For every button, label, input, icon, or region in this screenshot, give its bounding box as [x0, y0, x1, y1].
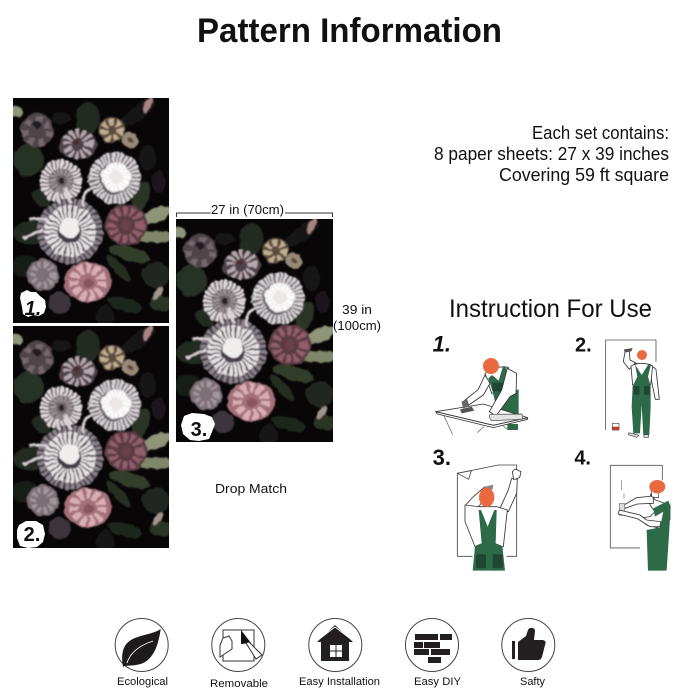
width dimension: [176, 202, 332, 217]
label: Ecological: [117, 676, 168, 688]
height dimension: [333, 302, 381, 333]
title: Pattern Information: [197, 12, 502, 50]
step 4: [574, 447, 671, 571]
step 2: 2.: [575, 335, 592, 357]
label: Easy Installation: [299, 676, 380, 688]
set contents text: Each set contains:: [532, 123, 669, 143]
label: Removable: [210, 678, 268, 690]
icon: brick wall: [406, 618, 462, 688]
badge: number 3: 3.: [191, 419, 207, 441]
icon: removable sheet: [210, 618, 268, 690]
icon: ecological leaf: [115, 618, 168, 688]
label: Easy DIY: [414, 676, 462, 688]
step 4: 4.: [574, 447, 591, 469]
panel: wallpaper sheet 1: [7, 96, 173, 327]
badge: number 3: [181, 413, 215, 441]
badge: number 2: 2.: [24, 524, 40, 546]
height dimension: 39 in: [342, 302, 372, 317]
label: Safty: [520, 676, 545, 688]
width dimension: 27 in (70cm): [211, 202, 284, 217]
badge: number 1: 1.: [25, 298, 41, 320]
step 1: [433, 332, 528, 435]
set contents text: 8 paper sheets: 27 x 39 inches: [434, 144, 669, 164]
badge: number 2: [17, 521, 45, 548]
instructions heading: Instruction For Use: [449, 295, 652, 323]
icon: thumbs up: [502, 618, 555, 688]
step 3: [433, 445, 521, 571]
drop match label: Drop Match: [215, 481, 287, 496]
height dimension: (100cm): [333, 318, 381, 333]
panel: wallpaper sheet 2: [7, 324, 173, 552]
panel: wallpaper sheet 3: [170, 217, 337, 446]
instructions illustrations: [433, 332, 671, 571]
step 2: [575, 335, 659, 437]
icon: house: [299, 618, 380, 688]
badge: number 1: [20, 290, 46, 320]
step 3: 3.: [433, 445, 451, 470]
set contents text: [434, 123, 669, 185]
set contents text: Covering 59 ft square: [499, 165, 669, 185]
step 1: 1.: [433, 332, 451, 357]
